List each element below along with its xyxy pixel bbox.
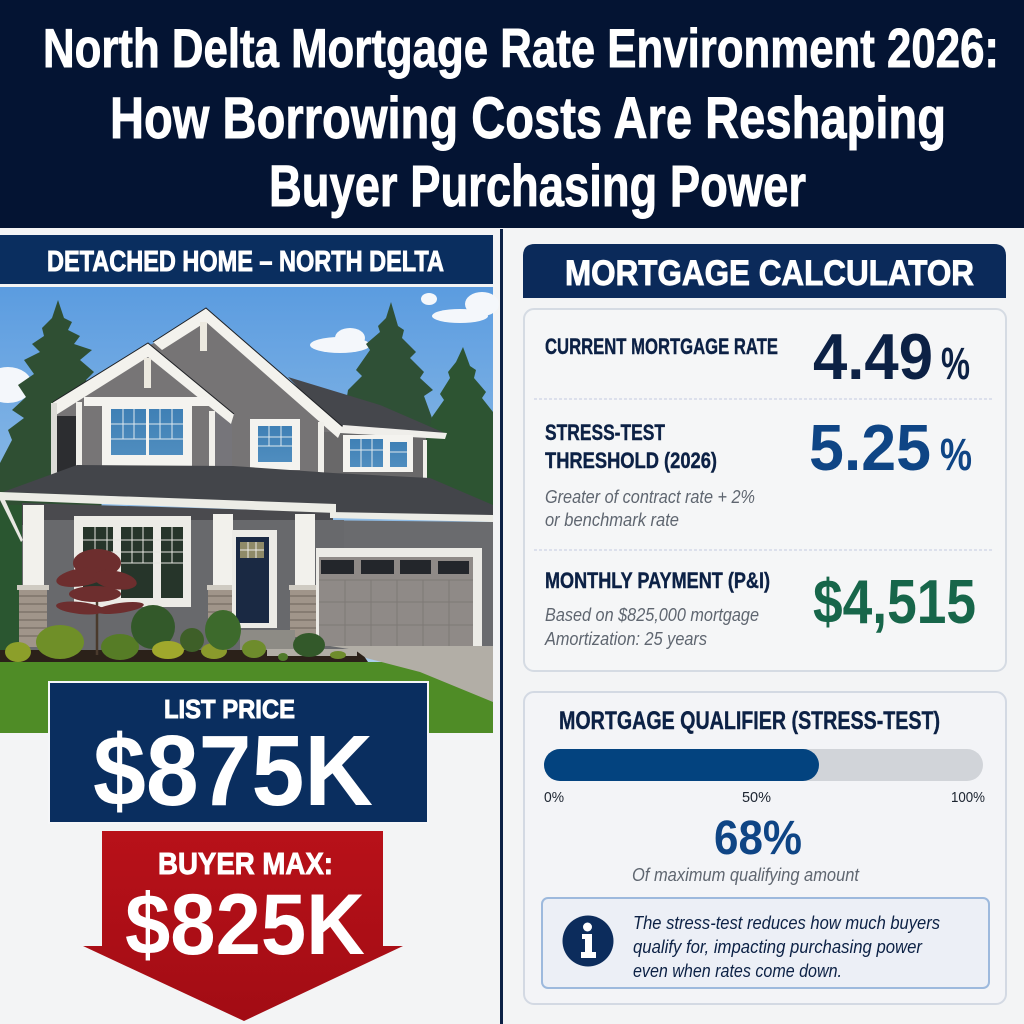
- progress bar chart: [544, 749, 985, 806]
- list price box: [49, 682, 428, 827]
- garage door: [316, 548, 482, 646]
- title banner: Buyer Purchasing Power: [269, 154, 806, 219]
- buyer max arrow: $825K: [125, 877, 365, 973]
- callout: stress-test note: The stress-test reduces how much buyers: [633, 913, 940, 933]
- panel divider: [500, 229, 503, 1024]
- heading: mortgage calculator: MORTGAGE CALCULATOR: [565, 254, 974, 293]
- row: stress-test threshold: 5.25: [809, 411, 931, 484]
- shrubs: [5, 605, 346, 662]
- upper windows: [84, 397, 209, 406]
- row: monthly payment: $4,515: [813, 568, 976, 637]
- progress bar chart: 100%: [951, 789, 985, 806]
- row: stress-test threshold: STRESS-TEST: [545, 420, 665, 445]
- row: stress-test threshold: THRESHOLD (2026): [545, 448, 717, 473]
- progress bar chart: 50%: [742, 789, 771, 806]
- callout: stress-test note: [542, 898, 989, 988]
- row: stress-test threshold: [545, 411, 972, 530]
- row: current mortgage rate: 4.49: [813, 320, 933, 393]
- row: monthly payment: Based on $825,000 mortgage: [545, 605, 759, 625]
- progress bar chart: 0%: [544, 789, 564, 806]
- row: monthly payment: Amortization: 25 years: [544, 629, 707, 649]
- illustration: house with trees and lawn: [0, 287, 499, 733]
- upper walls: [150, 318, 340, 478]
- list price box: LIST PRICE: [164, 694, 295, 724]
- panel: detached home: [0, 235, 499, 1021]
- buyer max arrow: [83, 831, 403, 1021]
- porch columns: [23, 505, 44, 587]
- porch window: [74, 516, 191, 607]
- icon: info: [562, 916, 614, 966]
- buyer max arrow: BUYER MAX:: [158, 846, 333, 881]
- pine trees: [0, 300, 110, 520]
- stat: 68 percent: Of maximum qualifying amount: [632, 865, 860, 885]
- row: monthly payment: MONTHLY PAYMENT (P&I): [545, 568, 770, 593]
- lawn and driveway: [240, 630, 295, 650]
- title banner: [0, 0, 1024, 228]
- row: stress-test threshold: Greater of contract rate + 2%: [545, 487, 755, 507]
- gable trim: [153, 308, 343, 438]
- front door: [232, 530, 277, 628]
- stat: 68 percent: [632, 812, 860, 885]
- panel heading: detached home: [0, 235, 493, 284]
- row: current mortgage rate: CURRENT MORTGAGE RATE: [545, 334, 778, 359]
- panel: mortgage qualifier: [524, 692, 1006, 1004]
- row: monthly payment: [544, 568, 976, 649]
- stat: 68 percent: 68%: [714, 812, 802, 865]
- row: current mortgage rate: [545, 320, 970, 393]
- rear roof: [288, 377, 447, 434]
- panel: mortgage calculator: [523, 244, 1006, 671]
- list price box: $875K: [93, 715, 373, 827]
- panel heading: detached home: DETACHED HOME – NORTH DELTA: [47, 246, 444, 278]
- beams: [0, 492, 336, 513]
- calculator card: [524, 309, 1006, 671]
- callout: stress-test note: qualify for, impacting purchasing power: [633, 937, 923, 957]
- callout: stress-test note: even when rates come down.: [633, 961, 842, 981]
- row: stress-test threshold: or benchmark rate: [545, 510, 679, 530]
- japanese maple: [55, 549, 144, 655]
- lower roof: [3, 465, 493, 516]
- heading: mortgage calculator: [523, 244, 1006, 298]
- row: current mortgage rate: %: [941, 338, 970, 389]
- row: stress-test threshold: %: [940, 429, 972, 480]
